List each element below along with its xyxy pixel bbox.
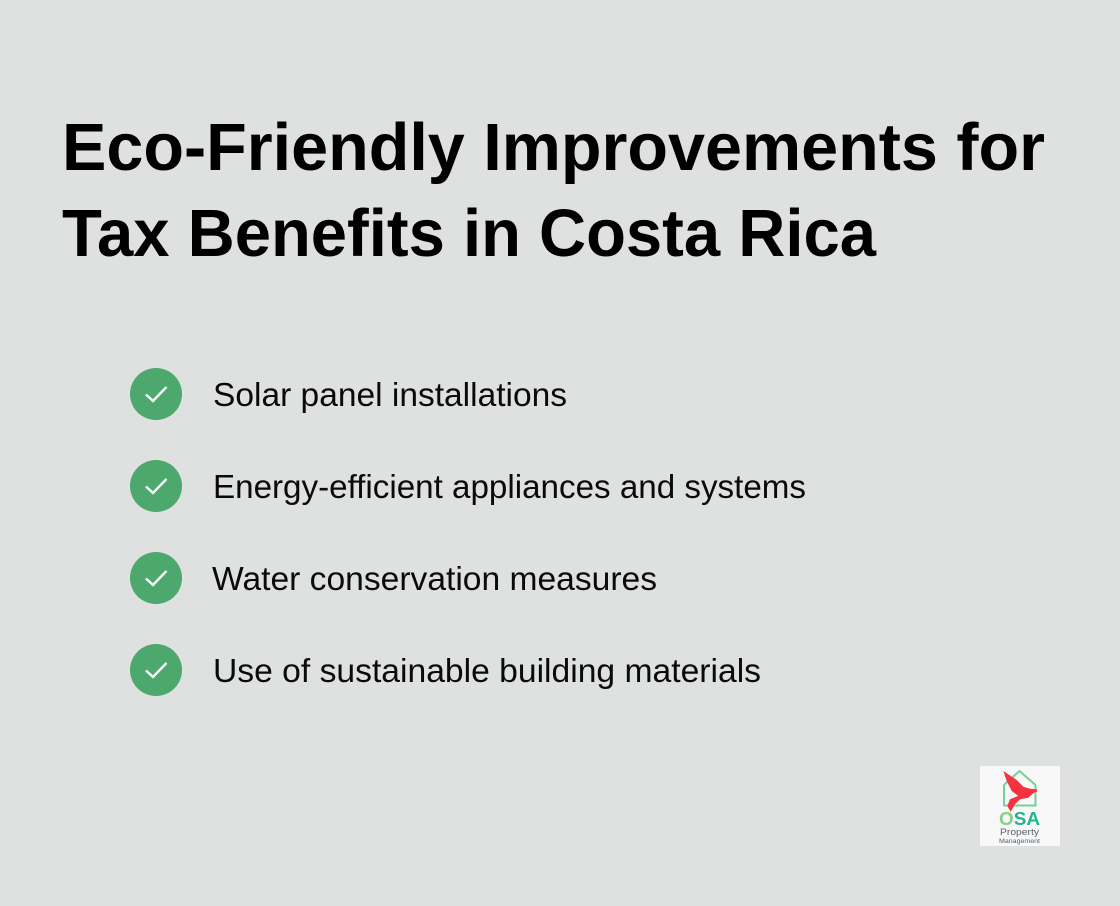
logo wordmark: OSA	[999, 809, 1040, 829]
icon: house outline	[1004, 771, 1036, 806]
icon: red bird	[1003, 771, 1037, 812]
logo: OSA Property Management: Property	[1000, 827, 1040, 837]
logo: OSA Property Management	[980, 766, 1060, 846]
title: Tax Benefits in Costa Rica	[62, 196, 877, 271]
item: energy-efficient appliances and systems: Energy-efficient appliances and systems	[213, 468, 806, 505]
item: use of sustainable building materials	[130, 644, 761, 696]
item: solar panel installations: Solar panel installations	[213, 376, 567, 413]
checklist	[130, 368, 806, 696]
item: use of sustainable building materials: Use of sustainable building materials	[213, 652, 761, 689]
title	[62, 110, 1045, 271]
logo: OSA Property Management: Management	[999, 838, 1040, 845]
item: solar panel installations	[130, 368, 567, 420]
item: energy-efficient appliances and systems	[130, 460, 806, 512]
item: water conservation measures	[130, 552, 657, 604]
title: Eco-Friendly Improvements for	[62, 110, 1045, 185]
item: water conservation measures: Water conservation measures	[212, 560, 657, 597]
